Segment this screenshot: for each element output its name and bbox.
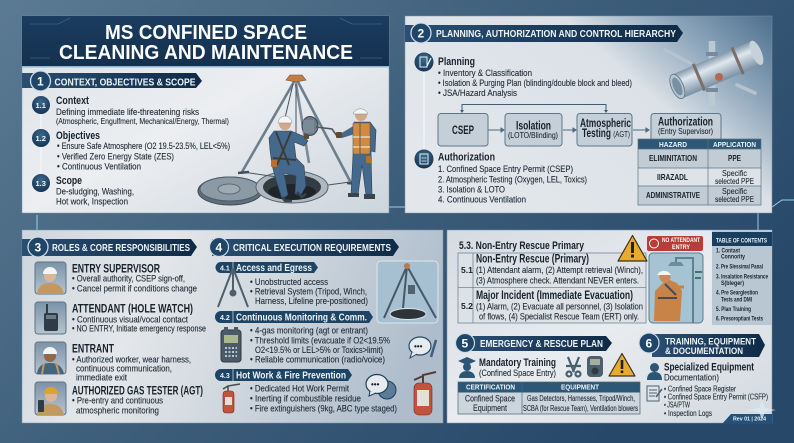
icon: fire extinguisher: [223, 384, 240, 413]
item 1.1 context: Context: [56, 95, 89, 107]
section header 6: [639, 333, 765, 357]
certification and equipment table: EQUIPMENT: [561, 383, 599, 392]
table of contents: 2. Pre Slessimal Panal: [716, 265, 763, 271]
icon: permit clipboard: [414, 150, 434, 168]
panel 2 background: [405, 16, 772, 213]
authorization text: 1. Confined Space Entry Permit (CSEP): [438, 164, 573, 174]
role: entry supervisor: ENTRY SUPERVISOR: [72, 264, 161, 276]
icon: radio: [35, 302, 66, 334]
icon: entrant portrait: [35, 342, 66, 374]
icon: large fire extinguisher: [414, 372, 436, 415]
flow box atmospheric testing: [577, 114, 632, 146]
rescue table: 5.2: [461, 301, 473, 311]
section header 4: 4: [216, 240, 222, 254]
hazard control table: Specific: [722, 169, 747, 178]
section header 3: 3: [34, 240, 42, 254]
role: attendant: • Continuous visual/vocal contact: [72, 314, 188, 324]
flow box atmospheric testing: Testing (AGT): [582, 128, 630, 140]
section header 1: [22, 71, 202, 91]
illustration: safety shower: [649, 253, 703, 323]
icon: speech bubble and handset: [409, 337, 436, 358]
rescue table: of flows, (4) Specialist Rescue Team (ERT) only.: [479, 311, 639, 321]
table of contents: 1. Contast: [716, 248, 740, 254]
authorization text: 4. Continuous Ventilation: [438, 195, 526, 205]
icon: gas tester portrait: [35, 382, 66, 415]
hazard control table: ADMINISTRATIVE: [646, 190, 700, 200]
pill 4.3: Hot Work & Fire Prevention: [236, 370, 346, 382]
section header 5: EMERGENCY & RESCUE PLAN: [480, 338, 603, 350]
section header 6: & DOCUMENTATION: [665, 346, 743, 357]
planning block: [414, 52, 632, 98]
section header 5: [456, 334, 612, 352]
documentation list: • Confined Space Entry Permit (CSFP): [664, 393, 768, 402]
table of contents: [712, 230, 772, 325]
sparkle: [747, 400, 776, 420]
manhole cover: [198, 177, 262, 205]
rescue table: Major Incident (Immediate Evacuation): [476, 290, 633, 302]
panel 1: context, objectives and scope: [22, 16, 389, 213]
certification and equipment table: CERTIFICATION: [466, 383, 515, 392]
hazard control table: PPE: [728, 153, 741, 163]
authorization block: [414, 150, 587, 205]
hazard control table: ELIMINITATION: [649, 153, 697, 163]
table of contents: 3. Insalation Resistance: [716, 274, 769, 280]
item 4.1 access and egress: • Unobstructed access: [250, 277, 328, 287]
icon: warning triangle: [618, 236, 647, 261]
role: entry supervisor: • Cancel permit if conditions change: [72, 283, 197, 293]
icon: supervisor portrait: [35, 262, 66, 294]
role: entrant: ENTRANT: [72, 344, 114, 356]
specialized equipment text: [664, 362, 754, 383]
item 1.2 objectives: • Ensure Safe Atmosphere (O2 19.5-23.5%, LEL<5%): [57, 141, 230, 151]
hazard control table: Specific: [722, 187, 747, 196]
item 1.2 objectives: 1.2: [36, 134, 46, 143]
item 1.3 scope: Scope: [56, 175, 82, 187]
item 4.1 access and egress: [216, 261, 438, 323]
specialized equipment text: Documentation): [664, 373, 719, 383]
flow box authorization: Authorization: [658, 117, 713, 129]
item 1.1 context: 1.1: [36, 101, 46, 110]
icon: gauge: [587, 356, 603, 377]
icon: graduate: [458, 357, 476, 378]
role: authorized gas tester: AUTHORIZED GAS TESTER (AGT): [72, 385, 203, 397]
rescue table: 5.1: [461, 265, 473, 275]
badge: no attendant entry: NO ATTENDANT: [662, 238, 700, 244]
item 1.3 scope: 1.3: [36, 179, 46, 188]
item 1.1 context: [32, 95, 229, 126]
hazard control table: selected PPE: [715, 195, 754, 204]
documentation list: • Confined Space Register: [664, 385, 736, 394]
panel 3 and 4 background: [22, 230, 443, 423]
item 4.2 continuous monitoring: • Threshold limits (evacuate if O2<19.5%: [250, 335, 390, 345]
pill 4.3: 4.3: [220, 373, 230, 380]
table of contents: S(bleger): [721, 281, 744, 287]
icon: gas monitor: [221, 327, 241, 362]
table of contents: 4. Pre Searglestion: [716, 290, 758, 296]
icon: chat bubbles: •••: [371, 380, 380, 389]
item 4.3 hot work and fire prevention: • Fire extinguishers (9kg, ABC type staged): [250, 404, 397, 414]
timeline line: [40, 112, 42, 176]
certification and equipment table: Confined Space: [465, 394, 515, 404]
rescue table: (1) Attendant alarm, (2) Attempt retrieval (Winch),: [476, 265, 643, 275]
pill 4.2: 4.2: [220, 315, 230, 322]
certification and equipment table: Equipment: [473, 403, 507, 413]
role: entry supervisor: • Overall authority, CSEP sign-off,: [72, 274, 185, 284]
item 4.1 access and egress: Harness, Lifeline pre-positioned): [255, 296, 368, 306]
section header 5: 5: [462, 336, 468, 350]
flow box isolation: [505, 114, 562, 146]
hazard control table: IIRAZADL: [657, 172, 688, 182]
icon: checklist: [414, 52, 434, 72]
mandatory training text: Mandatory Training: [479, 357, 556, 369]
hazard control table: selected PPE: [715, 177, 754, 186]
revision tag: Rev 01 | 2024: [733, 416, 767, 422]
section header 3: ROLES & CORE RESPONSIBILITIES: [52, 242, 190, 254]
hazard control table: APPLICATION: [713, 140, 756, 149]
item 1.3 scope: [32, 174, 134, 206]
rescue table: [458, 253, 646, 323]
table of contents: 6. Presoroptiani Tests: [716, 317, 763, 323]
winch: [285, 82, 337, 136]
panel 6: training, equipment and documentation: [639, 333, 772, 424]
item 4.3 hot work and fire prevention: • Dedicated Hot Work Permit: [250, 384, 349, 394]
item 4.2 continuous monitoring: [215, 311, 436, 365]
item 4.3 hot work and fire prevention: • Inerting if combustible residue: [250, 394, 361, 404]
illustration: tripod rescue over manhole: [198, 75, 376, 205]
tripod: [238, 80, 358, 185]
panel 5: emergency and rescue plan: [456, 334, 640, 414]
panel 1 background: [22, 16, 389, 213]
section header 2: PLANNING, AUTHORIZATION AND CONTROL HIERARCHY: [436, 28, 676, 40]
hazard control table: HAZARD: [659, 140, 688, 149]
badge: no attendant entry: ENTRY: [672, 245, 690, 251]
role: entrant: • Authorized worker, wear harness,: [72, 354, 191, 364]
icon: warning triangle: [609, 354, 635, 376]
item 1.2 objectives: • Verified Zero Energy State (ZES): [57, 152, 174, 162]
item 1.1 context: (Atmospheric, Engulfment, Mechanical/Energy, Thermal): [56, 117, 229, 126]
documentation list: [664, 385, 768, 418]
section header 1: 1: [37, 74, 44, 88]
pill 4.1: Access and Egress: [236, 263, 312, 274]
icon: tripod: [218, 268, 248, 307]
documentation list: • JSA/PTW: [664, 401, 690, 410]
section header 4: CRITICAL EXECUTION REQUIREMENTS: [233, 242, 391, 254]
authorization text: 2. Atmospheric Testing (Oxygen, LEL, Toxics): [438, 174, 587, 184]
role: authorized gas tester: atmospheric monitoring: [76, 405, 159, 415]
flow box atmospheric testing: Atmospheric: [580, 118, 631, 130]
badge: no attendant entry: [647, 236, 703, 251]
item 4.2 continuous monitoring: • Reliable communication (radio/voice): [250, 355, 385, 365]
section header 6: 6: [646, 336, 652, 350]
item 1.2 objectives: • Continuous Ventilation: [57, 162, 141, 172]
authorization text: [438, 152, 587, 205]
role: attendant: ATTENDANT (HOLE WATCH): [72, 304, 193, 316]
rescue table: (1) Alarm, (2) Evacuate all personnel, (3) Isolation: [476, 301, 643, 311]
item 1.1 context: Defining immediate life-threatening risks: [56, 107, 199, 117]
pill 4.2: Continuous Monitoring & Comm.: [236, 312, 367, 324]
planning text: • Inventory & Classification: [438, 68, 532, 78]
role: entrant: continuous communication,: [76, 364, 172, 374]
flow box authorization: (Entry Supervisor): [658, 127, 713, 136]
specialized equipment text: Specialized Equipment: [664, 362, 754, 374]
certification and equipment table: [458, 382, 640, 414]
item 1.3 scope: De-sludging, Washing,: [56, 186, 134, 196]
flow box CSEP: CSEP: [452, 125, 474, 137]
panel 3: roles and core responsibilities: [22, 237, 206, 415]
rescue table: Non-Entry Rescue (Primary): [476, 254, 589, 266]
pill 4.1: 4.1: [220, 266, 230, 272]
pill 4.3: [215, 369, 352, 382]
flow arrows: [488, 128, 649, 132]
mandatory training text: [479, 357, 556, 378]
flow box isolation: Isolation: [516, 120, 551, 132]
section header 1: CONTEXT, OBJECTIVES & SCOPE: [54, 76, 196, 88]
panel 4: critical execution requirements: [210, 238, 438, 415]
documentation list: • Inspection Logs: [664, 409, 712, 418]
planning text: Planning: [438, 56, 475, 68]
circuit connectors: [37, 200, 794, 232]
icon: specialist person: [647, 363, 662, 380]
table of contents: TABLE OF CONTENTS: [716, 238, 767, 245]
item 1.2 objectives: Objectives: [56, 130, 100, 142]
title line 2: CLEANING AND MAINTENANCE: [59, 42, 353, 64]
role: authorized gas tester: • Pre-entry and continuous: [72, 396, 163, 406]
non-entry rescue block: [458, 236, 703, 323]
heading 5.3: 5.3. Non-Entry Rescue Primary: [459, 240, 585, 252]
item 4.1 access and egress: • Retrieval System (Tripod, Winch,: [250, 286, 367, 296]
manhole opening: [256, 171, 328, 203]
authorization text: 3. Isolation & LOTO: [438, 185, 505, 195]
pill 4.2: [215, 311, 373, 324]
item 1.2 objectives: [32, 129, 230, 172]
certification and equipment table: Gas Detectors, Harnesses, Tripod/Winch,: [527, 394, 635, 403]
planning text: • JSA/Hazard Analysis: [438, 88, 517, 98]
role: attendant: • NO ENTRY, Initiate emergency response: [72, 324, 206, 334]
hazard control table: [638, 139, 761, 205]
role: entry supervisor: [35, 262, 197, 294]
certification and equipment table: SCBA (for Rescue Team), Ventilation blowers: [523, 404, 638, 413]
title banner: [22, 16, 389, 68]
authorization text: Authorization: [438, 152, 495, 164]
role: entrant: immediate exit: [76, 373, 127, 383]
title line 1: MS CONFINED SPACE: [105, 22, 307, 44]
illustration: isolated pipe with blinds: [665, 38, 767, 106]
panel 2: planning, authorization and control hierarchy: [405, 16, 772, 213]
table of contents: Connority: [721, 255, 746, 261]
illustration: tripod over hole: [377, 261, 438, 323]
pill 4.1: [216, 262, 318, 274]
icon: harness: [566, 357, 581, 376]
item 4.3 hot work and fire prevention: [215, 369, 436, 415]
planning text: • Isolation & Purging Plan (blinding/double block and bleed): [438, 78, 632, 88]
flow diagram: [438, 104, 721, 146]
icon: chat bubbles: [366, 374, 396, 399]
planning text: [438, 56, 632, 98]
section header 4: [210, 238, 399, 256]
section header 3: [22, 237, 197, 257]
flow box CSEP: [438, 114, 488, 146]
role: entrant: [35, 342, 191, 383]
table of contents: Tests and DMI: [721, 297, 752, 303]
section header 6: TRAINING, EQUIPMENT: [665, 337, 756, 348]
standing worker: [336, 109, 376, 199]
mandatory training text: (Confined Space Entry): [479, 368, 556, 378]
icon: speech bubble and handset: •••: [414, 342, 423, 351]
section header 2: [405, 23, 683, 43]
item 4.2 continuous monitoring: O2<19.5% or LEL>5% or Toxics>limit): [255, 345, 383, 355]
seated worker: [269, 116, 309, 201]
icon: document and pen: [647, 386, 662, 401]
panel 5 and 6 background: [447, 230, 772, 423]
section header 2: 2: [418, 26, 424, 40]
flow box authorization: [651, 114, 721, 146]
vertical line: [423, 72, 425, 150]
rescue table: (3) Atmosphere check. Attendant NEVER enters.: [476, 275, 639, 285]
flow box isolation: (LOTO/Blinding): [508, 131, 558, 140]
role: authorized gas tester: [35, 382, 203, 415]
item 4.2 continuous monitoring: • 4-gas monitoring (agt or entrant): [250, 326, 368, 336]
item 1.3 scope: Hot work, Inspection: [56, 196, 128, 206]
role: attendant: [35, 302, 206, 334]
table of contents: 5. Plan Training: [716, 307, 751, 313]
